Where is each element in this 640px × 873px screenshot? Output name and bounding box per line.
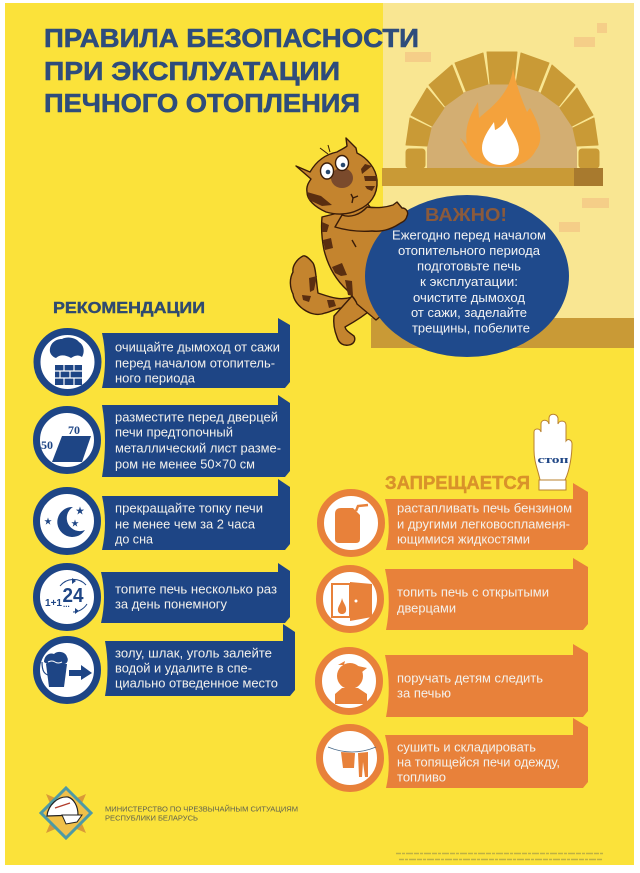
- text: ministry name: РЕСПУБЛИКИ БЕЛАРУСЬ: [105, 814, 198, 822]
- recommendation 2: metal sheet: печи предтопочный: [115, 424, 233, 440]
- recommendation 2: metal sheet: 50: [41, 438, 53, 452]
- heading: prohibited: ЗАПРЕЩАЕТСЯ: [385, 473, 530, 493]
- recommendation 5: remove ash: золу, шлак, уголь залейте: [115, 646, 272, 660]
- prohibition 1: flammable liquids: и другими легковоспламеня-: [397, 516, 570, 532]
- prohibition 2: open doors: топить печь с открытыми: [397, 584, 549, 600]
- callout: important note: к эксплуатации:: [420, 275, 518, 289]
- panel: wall with stove: [371, 3, 634, 348]
- icon: ministry emblem: [41, 788, 91, 838]
- recommendation 2: metal sheet: металлический лист разме-: [115, 440, 281, 456]
- icon: stove arch with flame: [382, 52, 603, 186]
- recommendation 3: stop before sleep: ★: [71, 519, 79, 528]
- prohibition 4: drying clothes: сушить и складировать: [397, 740, 536, 754]
- recommendation 2: metal sheet: 70: [68, 423, 80, 437]
- prohibition 1: flammable liquids: [320, 483, 588, 554]
- callout: important note: очистите дымоход: [413, 291, 526, 305]
- recommendation 4: heat several times a day: [36, 563, 290, 628]
- text: ministry name: МИНИСТЕРСТВО ПО ЧРЕЗВЫЧАЙНЫМ СИТУАЦИЯМ: [105, 804, 298, 814]
- recommendation 4: heat several times a day: 1+1: [45, 598, 62, 609]
- recommendation 3: stop before sleep: до сна: [115, 532, 154, 546]
- prohibition 2: open doors: [320, 558, 588, 630]
- callout: important note: [365, 195, 569, 357]
- title: ПЕЧНОГО ОТОПЛЕНИЯ: [44, 88, 360, 118]
- icon: stop glove: [534, 414, 572, 490]
- recommendation 1: clean the chimney: ного периода: [115, 370, 196, 386]
- callout: important note: подготовьте печь: [417, 260, 521, 274]
- recommendation 2: metal sheet: [36, 395, 290, 477]
- text: ministry name: [105, 804, 298, 822]
- recommendation 3: stop before sleep: не менее чем за 2 часа: [115, 516, 256, 532]
- icon: cat: [290, 138, 400, 345]
- recommendation 1: clean the chimney: перед началом отопитель-: [115, 356, 275, 370]
- recommendation 4: heat several times a day: топите печь несколько раз: [115, 582, 277, 596]
- callout: important note: ВАЖНО!: [425, 205, 507, 225]
- icon: stop glove: стоп: [538, 455, 568, 466]
- title: ПРАВИЛА БЕЗОПАСНОСТИ: [44, 23, 419, 53]
- callout: important note: Ежегодно перед началом: [392, 228, 546, 242]
- recommendation 3: stop before sleep: [36, 479, 290, 552]
- callout: important note: отопительного периода: [398, 244, 540, 258]
- callout: important note: от сажи, заделайте: [411, 306, 527, 320]
- recommendation 4: heat several times a day: за день понемногу: [115, 596, 227, 612]
- recommendation 2: metal sheet: ром не менее 50×70 см: [115, 456, 255, 472]
- prohibition 1: flammable liquids: растапливать печь бензином: [397, 500, 572, 516]
- recommendation 3: stop before sleep: ★: [75, 506, 85, 516]
- title: [44, 23, 419, 118]
- title: ПРИ ЭКСПЛУАТАЦИИ: [44, 56, 340, 86]
- prohibition 2: open doors: дверцами: [397, 600, 456, 616]
- icon: cat arm and paw over the callout: [335, 202, 408, 231]
- prohibition 3: children: поручать детям следить: [397, 670, 543, 686]
- recommendation 5: remove ash: циально отведенное место: [115, 676, 278, 690]
- recommendation 2: metal sheet: разместите перед дверцей: [115, 410, 278, 424]
- prohibition 4: drying clothes: топливо: [397, 770, 446, 784]
- recommendation 5: remove ash: водой и удалите в спе-: [115, 660, 252, 676]
- recommendation 5: remove ash: [36, 624, 295, 700]
- prohibition 3: children: [318, 644, 588, 717]
- heading: recommendations: РЕКОМЕНДАЦИИ: [53, 300, 205, 317]
- fine print (illegible in the reference): [396, 854, 603, 860]
- recommendation 4: heat several times a day: ...: [63, 600, 70, 609]
- prohibition 4: drying clothes: [320, 718, 588, 788]
- prohibition 3: children: за печью: [397, 686, 451, 700]
- prohibition 1: flammable liquids: ющимися жидкостями: [397, 532, 530, 546]
- recommendation 1: clean the chimney: [37, 318, 290, 392]
- callout: important note: трещины, побелите: [412, 322, 530, 336]
- recommendation 3: stop before sleep: прекращайте топку печи: [115, 500, 263, 516]
- recommendation 1: clean the chimney: очищайте дымоход от сажи: [115, 340, 280, 354]
- prohibition 4: drying clothes: на топящейся печи одежду,: [397, 754, 560, 770]
- recommendation 4: heat several times a day: 24: [62, 585, 84, 607]
- recommendation 3: stop before sleep: ★: [44, 517, 52, 526]
